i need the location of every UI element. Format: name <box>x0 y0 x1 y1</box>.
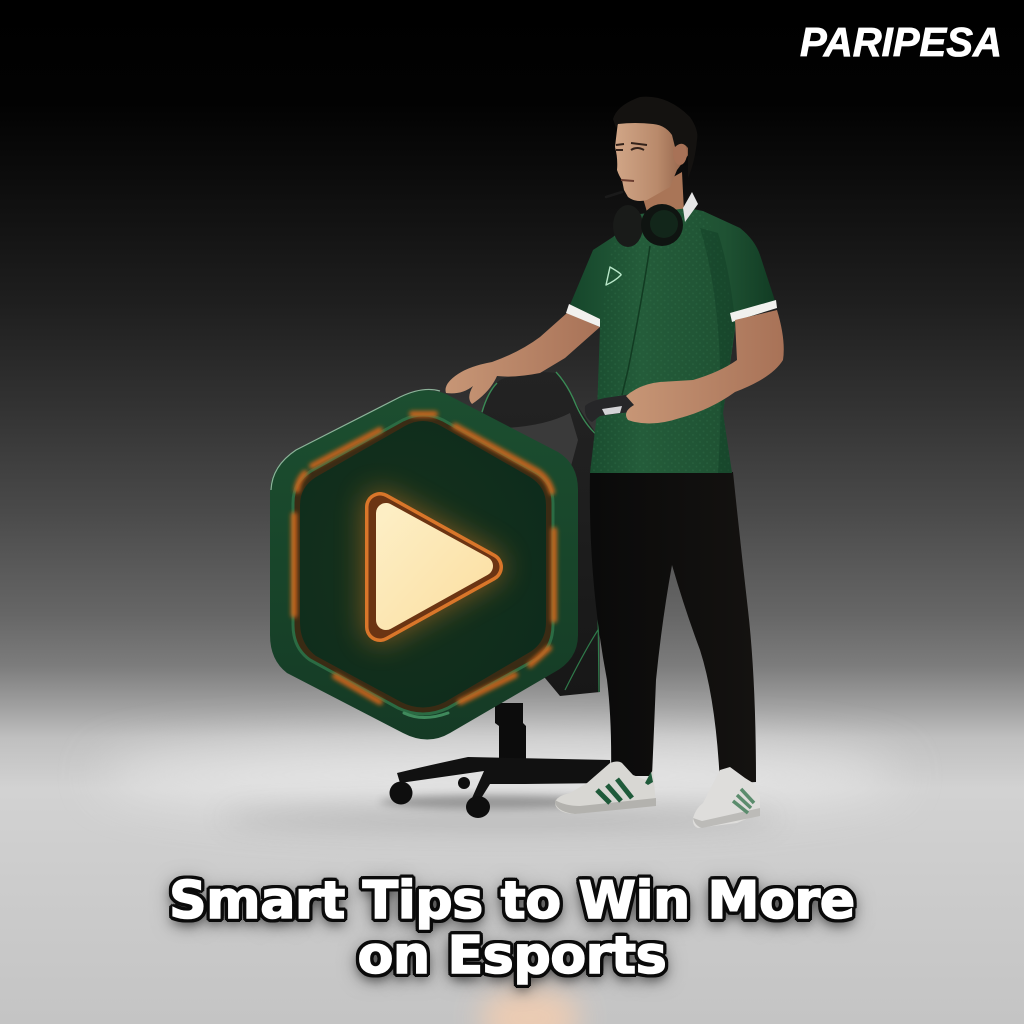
hexagon play badge <box>270 389 578 740</box>
head <box>613 97 697 201</box>
hair <box>613 97 697 178</box>
title line 2: on Esports <box>358 926 666 986</box>
play icon dark ring <box>380 507 488 627</box>
logo: PARIPESA: PARIPESA <box>800 19 1002 65</box>
title <box>160 869 865 1000</box>
chair back <box>480 372 600 696</box>
inner recess <box>293 415 553 714</box>
eyes, brows and lips <box>616 143 647 181</box>
hexagon frame <box>270 390 578 740</box>
gaming chair <box>390 372 612 818</box>
trousers <box>590 472 756 784</box>
game controller <box>585 392 648 422</box>
chair base <box>397 757 612 800</box>
floor glow <box>100 737 900 1024</box>
headset cable <box>622 246 650 395</box>
right shoe <box>693 767 760 828</box>
back arm <box>446 313 600 404</box>
jersey sleeve cuffs <box>566 300 777 327</box>
neck <box>642 172 684 222</box>
jersey <box>566 208 777 473</box>
headphones band <box>683 192 698 222</box>
headphones <box>613 204 683 247</box>
person <box>446 97 784 828</box>
inner panel <box>300 421 546 708</box>
play icon glow <box>380 507 488 627</box>
jersey shading <box>700 228 735 473</box>
chair column <box>495 703 526 760</box>
front arm <box>626 310 784 424</box>
ear <box>673 141 687 165</box>
highlight edge <box>271 389 440 490</box>
microphone <box>606 192 622 197</box>
orange rim segments <box>294 414 554 702</box>
casters <box>390 777 490 818</box>
left shoe <box>555 762 656 814</box>
play icon cream fill <box>386 513 483 620</box>
face <box>615 108 692 201</box>
chest logo <box>606 267 621 285</box>
lower rim highlight <box>404 713 448 718</box>
play icon outer ring <box>380 507 488 627</box>
jersey texture <box>590 211 735 473</box>
title line 1: Smart Tips to Win More <box>169 871 855 931</box>
